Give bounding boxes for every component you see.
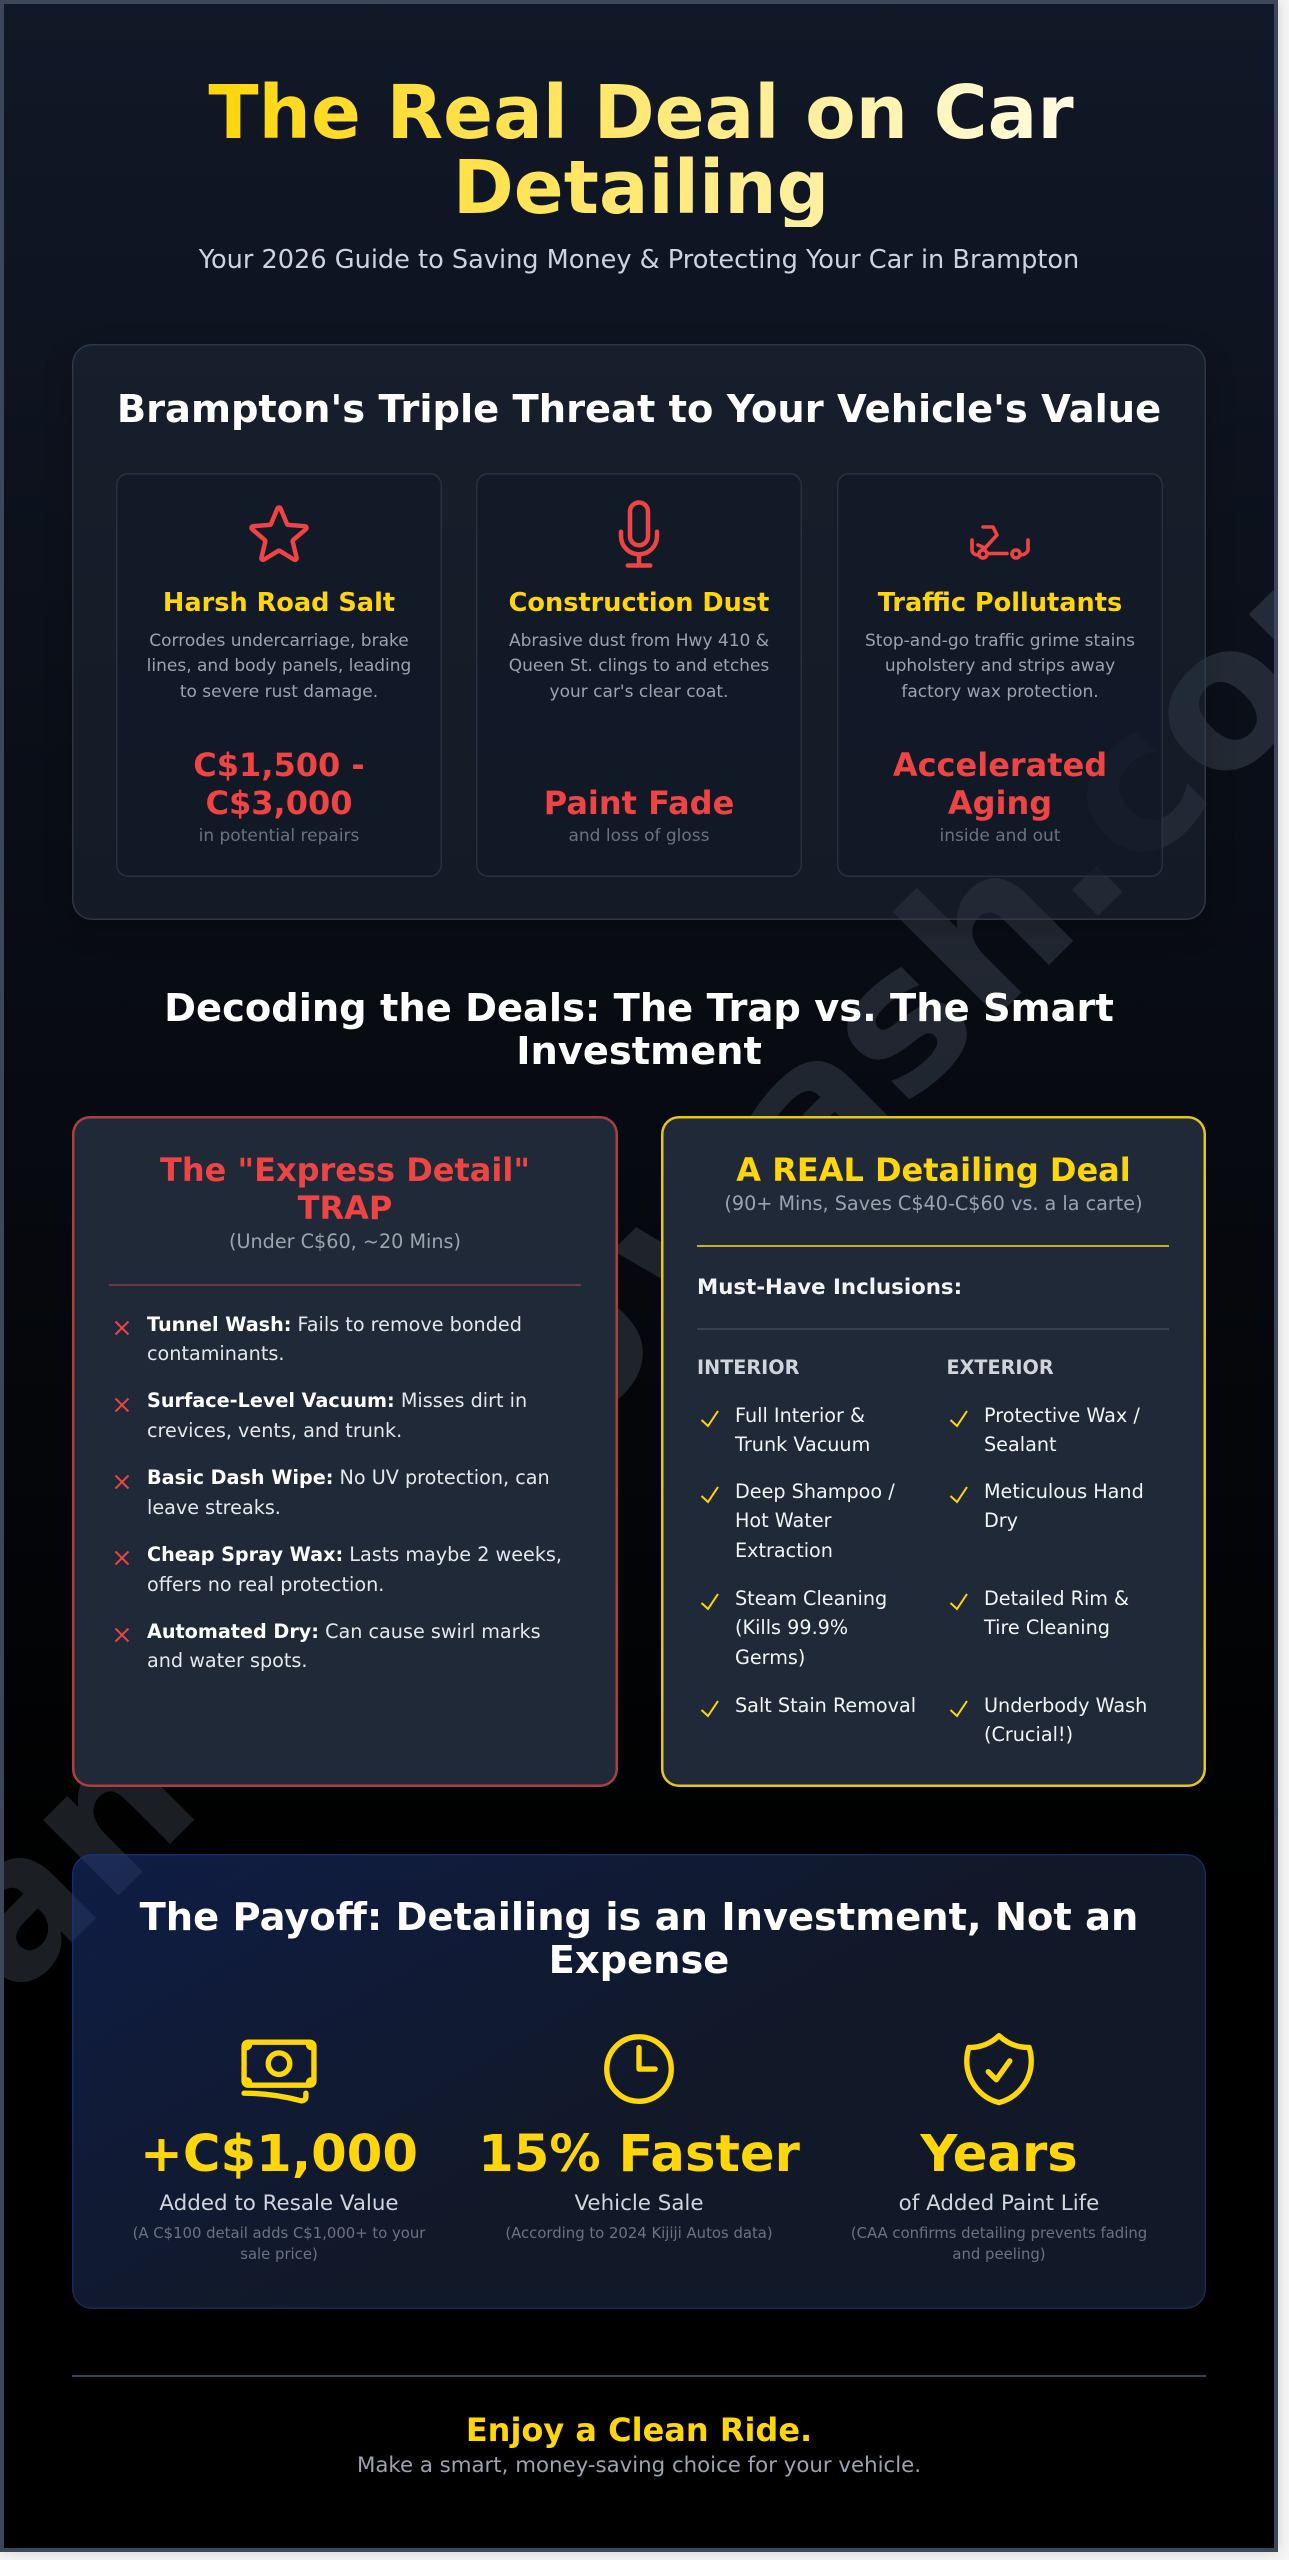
footer rule <box>72 2375 1206 2376</box>
check item: underbody: (Crucial!) <box>984 1723 1073 1746</box>
card title: Traffic Pollutants <box>878 588 1122 618</box>
check item: salt stain: Salt Stain Removal <box>735 1694 916 1716</box>
icon: clock <box>604 2034 674 2104</box>
panel: express detail trap <box>72 1116 618 1787</box>
card description: to severe rust damage. <box>180 682 378 702</box>
heading: payoff: The Payoff: Detailing is an Investment, Not an <box>140 1895 1138 1940</box>
card description: Abrasive dust from Hwy 410 & <box>509 630 769 650</box>
big number: Years <box>920 2124 1078 2184</box>
check item: wax: Protective Wax / <box>984 1404 1140 1426</box>
card description: your car's clear coat. <box>550 682 728 702</box>
check item: shampoo <box>700 1480 895 1562</box>
list item: automated dry: and water spots. <box>147 1649 308 1672</box>
title: Detailing <box>453 146 829 231</box>
list item: surface vacuum: Surface-Level Vacuum: Misses dirt in <box>147 1389 527 1412</box>
stat: accelerated aging: Accelerated <box>893 746 1107 784</box>
list item: automated dry: Automated Dry: Can cause swirl marks <box>147 1620 541 1643</box>
card description: lines, and body panels, leading <box>147 656 411 676</box>
card description: Stop-and-go traffic grime stains <box>865 630 1135 650</box>
divider <box>697 1245 1169 1247</box>
heading: payoff: Expense <box>549 1938 729 1983</box>
title: The Real Deal on Car <box>208 70 1074 156</box>
stat caption: in potential repairs <box>199 826 359 846</box>
check item: steam: (Kills 99.9% <box>735 1616 848 1639</box>
real deal title: A REAL Detailing Deal <box>736 1151 1131 1189</box>
check item: vacuum <box>700 1404 870 1456</box>
stat caption: inside and out <box>940 826 1060 846</box>
stat: repair cost: C$1,500 - <box>193 746 365 784</box>
trap title <box>160 1151 530 1227</box>
stat note <box>133 2224 426 2263</box>
trap title: The "Express Detail" <box>160 1151 530 1189</box>
list item: automated dry <box>114 1620 541 1672</box>
check item: shampoo: Deep Shampoo / <box>735 1480 895 1502</box>
check item: wax: Sealant <box>984 1433 1057 1456</box>
stat note: sale price) <box>240 2245 318 2263</box>
stat note: (CAA confirms detailing prevents fading <box>851 2224 1147 2242</box>
big number: 15% Faster <box>478 2124 800 2184</box>
trap title: TRAP <box>298 1189 392 1227</box>
stat column: resale value <box>133 2040 426 2263</box>
heading: decoding the deals: Investment <box>516 1028 762 1074</box>
check item: steam <box>700 1586 887 1669</box>
panel: real detailing deal: Extraction <box>735 1539 833 1562</box>
heading: decoding the deals: Decoding the Deals: The Trap vs. The Smart <box>164 986 1114 1030</box>
stat: paint fade: Paint Fade <box>544 784 734 822</box>
heading: triple threat: Brampton's Triple Threat to Your Vehicle's Value <box>117 387 1161 432</box>
footer text: Make a smart, money-saving choice for your vehicle. <box>357 2453 921 2478</box>
panel: the payoff <box>72 1854 1206 2309</box>
panel: triple threat <box>72 344 1206 920</box>
card title: Harsh Road Salt <box>163 588 395 618</box>
list item: dash wipe: leave streaks. <box>147 1496 281 1519</box>
card title: Construction Dust <box>509 588 769 618</box>
stat note: (According to 2024 Kijiji Autos data) <box>505 2224 773 2242</box>
list item: dash wipe <box>114 1466 550 1519</box>
stat label: Added to Resale Value <box>159 2191 399 2216</box>
icon: shield check <box>964 2033 1034 2106</box>
card: road salt <box>116 473 442 877</box>
stat label: of Added Paint Life <box>899 2191 1099 2216</box>
list item: tunnel wash <box>114 1312 522 1365</box>
stat label: Vehicle Sale <box>574 2191 704 2216</box>
check item: steam: Steam Cleaning <box>735 1586 887 1610</box>
watermark: diagonal site name: wash <box>555 802 1117 1363</box>
stat caption: and loss of gloss <box>568 826 710 846</box>
inclusions heading: Must-Have Inclusions: <box>697 1275 962 1300</box>
card description: factory wax protection. <box>901 682 1099 702</box>
panel: real detailing deal <box>661 1116 1206 1787</box>
check item: hand dry: Dry <box>984 1509 1018 1532</box>
stat: repair cost <box>193 746 365 822</box>
column heading: interior: INTERIOR <box>697 1356 799 1379</box>
check item: vacuum: Trunk Vacuum <box>735 1433 870 1456</box>
check item: rim: Detailed Rim & <box>984 1586 1129 1610</box>
check item: hand dry: Meticulous Hand <box>984 1480 1144 1502</box>
heading: payoff <box>140 1895 1138 1983</box>
stat: accelerated aging <box>893 746 1107 822</box>
card description <box>509 630 769 702</box>
big number: +C$1,000 <box>140 2124 418 2184</box>
stat column: faster sale <box>478 2034 800 2242</box>
card description: upholstery and strips away <box>885 656 1115 676</box>
list item: spray wax: Cheap Spray Wax: Lasts maybe 2 weeks, <box>147 1543 562 1566</box>
card: construction dust <box>476 473 802 877</box>
check item: rim <box>950 1586 1129 1639</box>
list item: tunnel wash: Tunnel Wash: Fails to remove bonded <box>147 1312 522 1336</box>
panel: real detailing deal: Germs) <box>735 1646 805 1669</box>
card: traffic pollutants <box>837 473 1163 877</box>
trap subtitle: (Under C$60, ~20 Mins) <box>229 1230 461 1253</box>
title <box>208 76 1074 226</box>
check item: shampoo: Hot Water <box>735 1509 832 1532</box>
icon: microphone <box>618 500 660 568</box>
list item: dash wipe: Basic Dash Wipe: No UV protection, can <box>147 1466 550 1489</box>
stat: repair cost: C$3,000 <box>206 784 352 822</box>
stat: accelerated aging: Aging <box>948 784 1052 822</box>
stat note: and peeling) <box>952 2245 1046 2263</box>
subtitle: Your 2026 Guide to Saving Money & Protecting Your Car in Brampton <box>199 244 1079 274</box>
card description <box>147 630 411 702</box>
list item: tunnel wash: contaminants. <box>147 1342 284 1365</box>
card description: Corrodes undercarriage, brake <box>149 630 409 650</box>
icon: banknotes <box>241 2040 317 2104</box>
stat note: (A C$100 detail adds C$1,000+ to your <box>133 2224 425 2242</box>
stat note <box>851 2224 1147 2263</box>
icon: scooter <box>970 525 1030 560</box>
list item: surface vacuum <box>114 1389 527 1442</box>
divider <box>109 1284 581 1286</box>
check item: vacuum: Full Interior & <box>735 1404 865 1426</box>
check item: underbody <box>950 1694 1147 1746</box>
card description: Queen St. clings to and etches <box>509 656 769 676</box>
heading: decoding the deals <box>164 986 1114 1074</box>
card description <box>865 630 1135 702</box>
list item: spray wax: offers no real protection. <box>147 1573 384 1596</box>
icon: star <box>249 505 309 562</box>
footer heading: Enjoy a Clean Ride. <box>466 2410 812 2448</box>
stat column: paint life <box>851 2033 1147 2263</box>
check item: hand dry <box>950 1480 1144 1532</box>
real deal subtitle: (90+ Mins, Saves C$40-C$60 vs. a la carte) <box>724 1192 1143 1214</box>
watermark: diagonal site name: auto <box>188 1218 701 1730</box>
list item: surface vacuum: crevices, vents, and trunk. <box>147 1419 402 1442</box>
check item: wax <box>950 1404 1140 1456</box>
list item: spray wax <box>114 1543 562 1596</box>
column heading: exterior: EXTERIOR <box>946 1356 1054 1379</box>
divider <box>697 1328 1169 1330</box>
check item: underbody: Underbody Wash <box>984 1694 1147 1716</box>
check item: rim: Tire Cleaning <box>984 1616 1110 1639</box>
